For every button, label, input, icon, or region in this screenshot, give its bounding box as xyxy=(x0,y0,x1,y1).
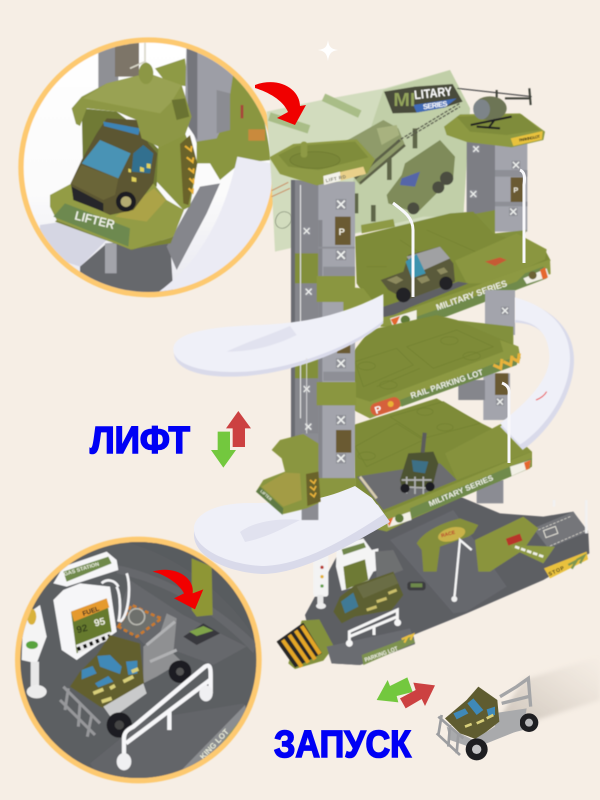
panel: fuel close-up circle xyxy=(13,537,267,790)
jeep xyxy=(381,247,455,302)
van on base xyxy=(333,572,426,623)
top floor xyxy=(355,212,551,319)
right pillar top xyxy=(463,138,527,247)
panel: ramp bottom spiral xyxy=(194,486,390,574)
arrow: launch green xyxy=(377,677,413,702)
stop sign strip: STOP xyxy=(548,565,566,578)
poster logo: Military Series: SERIES xyxy=(422,99,448,111)
fence xyxy=(124,666,211,762)
panel: parking base xyxy=(277,497,589,669)
arrow: lift up red xyxy=(226,411,251,447)
icon: gas pump xyxy=(53,552,129,660)
panel: lifter close-up circle xyxy=(13,33,283,300)
barrier xyxy=(475,517,555,572)
text: Lift label: LIFT RD xyxy=(325,174,347,183)
text: LIFTER: LIFTER xyxy=(73,209,116,232)
lower floor xyxy=(353,398,532,528)
arrow: red curved fuel xyxy=(153,570,203,609)
panel: lower floors xyxy=(343,290,532,528)
title: launch label: ЗАПУСК xyxy=(274,724,412,766)
text: Rail Parking Lot: RAIL PARKING LOT xyxy=(409,367,484,401)
panel: white ramps xyxy=(173,294,574,450)
arrow: lift down green xyxy=(211,432,236,468)
parking lot kerb xyxy=(327,628,415,665)
lamp xyxy=(451,500,588,602)
lifter cab xyxy=(50,63,197,250)
ramp xyxy=(159,156,272,292)
panel: lower rail xyxy=(373,452,532,532)
poster truck xyxy=(387,140,455,214)
arrow: launch red xyxy=(400,683,435,708)
panel: lamps xyxy=(393,170,525,463)
armoured truck xyxy=(400,433,438,494)
icon: sparkle xyxy=(318,40,338,61)
panel: small lifter on tower xyxy=(256,358,321,520)
yellow striped ramp xyxy=(277,619,334,669)
helicopter xyxy=(457,88,532,128)
panel: left tower pillar: P xyxy=(339,227,345,237)
olive post xyxy=(192,558,213,617)
poster tank xyxy=(268,94,405,185)
top floor rail xyxy=(378,259,551,328)
text: Parking Lot partial: KING LOT xyxy=(198,727,231,761)
traffic light xyxy=(313,553,328,609)
truck xyxy=(60,613,191,738)
fence xyxy=(347,610,400,645)
top right cap xyxy=(444,113,545,147)
text: Gas Station: GAS STATION xyxy=(63,561,100,578)
text: Fuel: FUEL xyxy=(82,606,100,618)
poster logo: Military Series xyxy=(384,84,463,113)
ramp: right spiral xyxy=(500,297,574,450)
arrow: red curved lifter xyxy=(255,82,306,125)
poster logo: Military Series: LITARY xyxy=(414,84,453,102)
icon: launched truck with motion blur xyxy=(437,657,600,760)
middle floor xyxy=(343,315,521,418)
top right cap: PARKING LOT xyxy=(519,134,541,143)
button xyxy=(183,623,220,645)
text: 92 95: 92 xyxy=(75,623,89,636)
text: Military Series lower rail: MILITARY SERIES xyxy=(427,473,495,509)
text: Parking Lot: PARKING LOT xyxy=(364,646,399,664)
helipad mat xyxy=(118,605,162,637)
poster logo: Military Series: MI xyxy=(393,89,415,110)
arch xyxy=(417,518,478,572)
arch: RACE xyxy=(441,530,456,539)
icon: gas pump: 95 xyxy=(93,616,107,630)
panel: left tower pillar xyxy=(291,180,375,515)
ramp: top left spiral xyxy=(173,294,383,377)
stop sign strip xyxy=(544,552,588,578)
right pillar top: P xyxy=(513,185,518,194)
hood xyxy=(72,75,192,147)
text: Lifter small: LIFTER xyxy=(259,489,273,502)
panel: poster backdrop xyxy=(267,70,551,328)
icon: traffic light xyxy=(22,605,47,698)
poster soldiers xyxy=(356,128,415,222)
right pillars xyxy=(453,290,515,503)
panel: left top cap xyxy=(269,139,375,185)
title: lift label: ЛИФТ xyxy=(90,420,190,462)
van xyxy=(71,118,157,215)
text: Military Series upper rail: MILITARY SERIES xyxy=(435,278,508,313)
middle floor: P xyxy=(374,404,384,417)
fuel pump xyxy=(336,538,403,591)
